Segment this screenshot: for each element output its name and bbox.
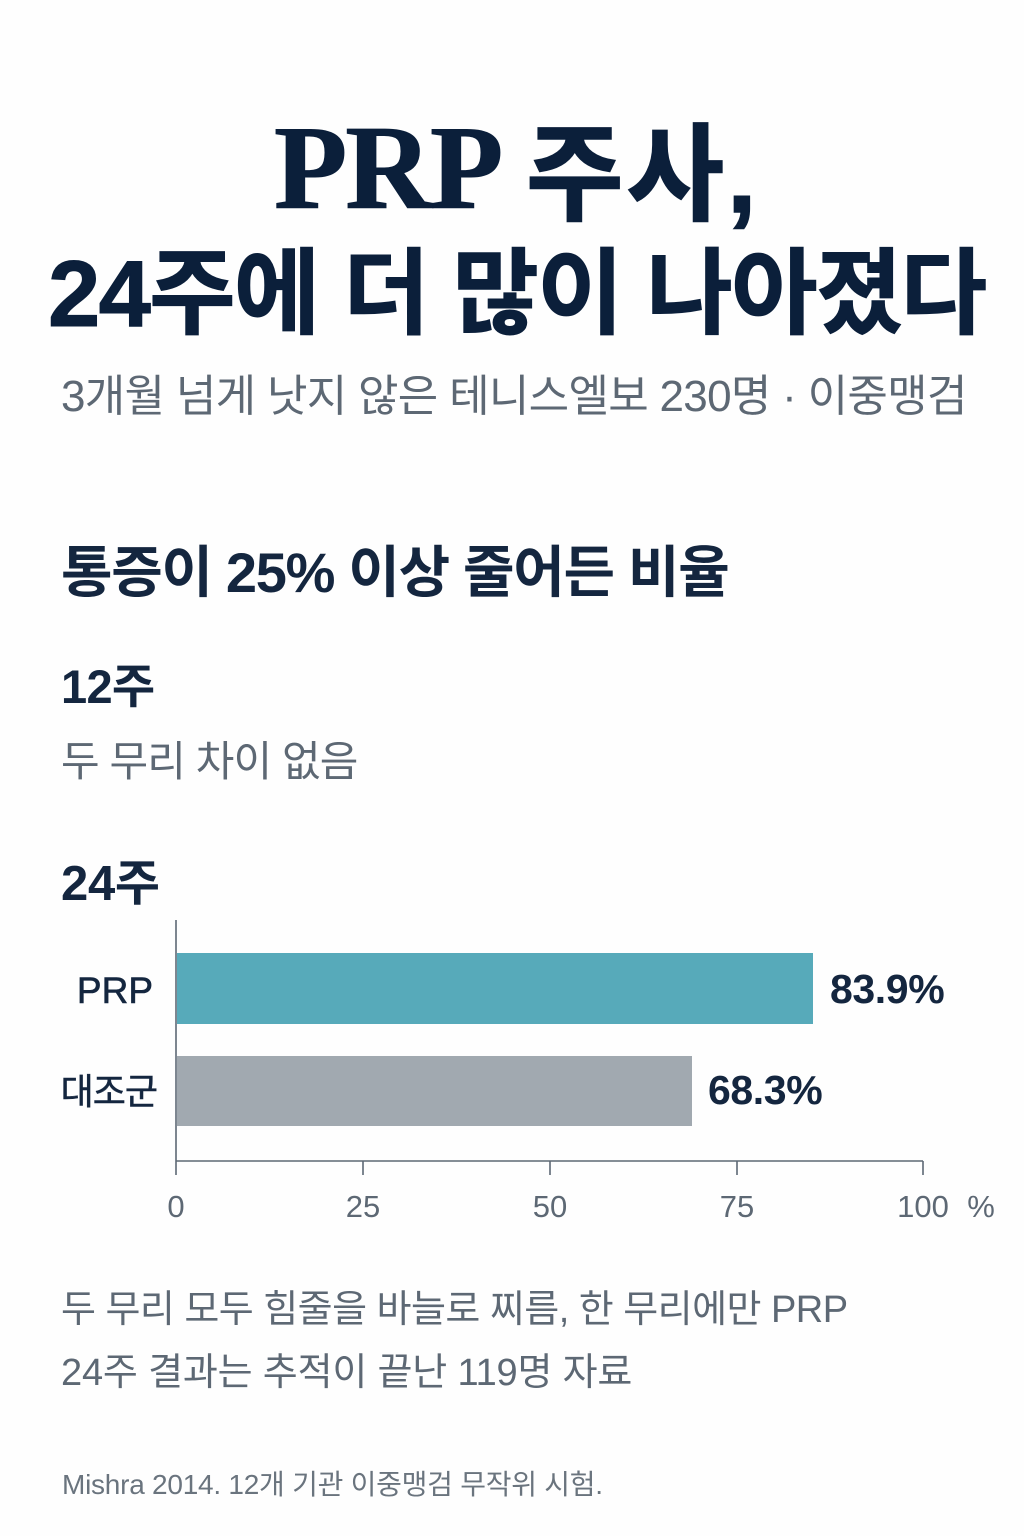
PRP bar: PRP xyxy=(77,970,153,1011)
axis labels: 75 xyxy=(720,1189,754,1224)
title: 주사, xyxy=(526,117,760,235)
12-week note: 두 무리 차이 없음 xyxy=(61,738,358,785)
axis labels: 0 xyxy=(167,1189,185,1224)
axis labels: 25 xyxy=(346,1189,380,1224)
method note: 24주 결과는 추적이 끝난 119명 자료 xyxy=(61,1352,632,1394)
axes xyxy=(176,920,923,1175)
axis labels: 50 xyxy=(533,1189,567,1224)
PRP bar: 83.9% xyxy=(830,966,944,1012)
axis labels: % xyxy=(967,1189,995,1224)
axis labels xyxy=(167,1189,995,1224)
axis labels: 100 xyxy=(897,1189,949,1224)
title: PRP xyxy=(274,101,501,234)
method note: 두 무리 모두 힘줄을 바늘로 찌름, 한 무리에만 PRP xyxy=(61,1289,848,1331)
control bar: 대조군 xyxy=(61,1071,157,1112)
12-week label: 12주 xyxy=(61,660,154,713)
control bar: 68.3% xyxy=(708,1067,822,1113)
PRP bar xyxy=(77,953,944,1024)
title xyxy=(48,101,986,346)
24-week label: 24주 xyxy=(61,857,160,911)
method note xyxy=(61,1289,848,1394)
title: 24주에 더 많이 나아졌다 xyxy=(48,241,986,346)
section heading: 통증이 25% 이상 줄어든 비율 xyxy=(61,541,728,604)
bar chart xyxy=(61,920,995,1224)
source: Mishra 2014. 12개 기관 이중맹검 무작위 시험. xyxy=(62,1469,603,1500)
subtitle: 3개월 넘게 낫지 않은 테니스엘보 230명 · 이중맹검 xyxy=(61,372,967,421)
control bar xyxy=(61,1056,822,1126)
